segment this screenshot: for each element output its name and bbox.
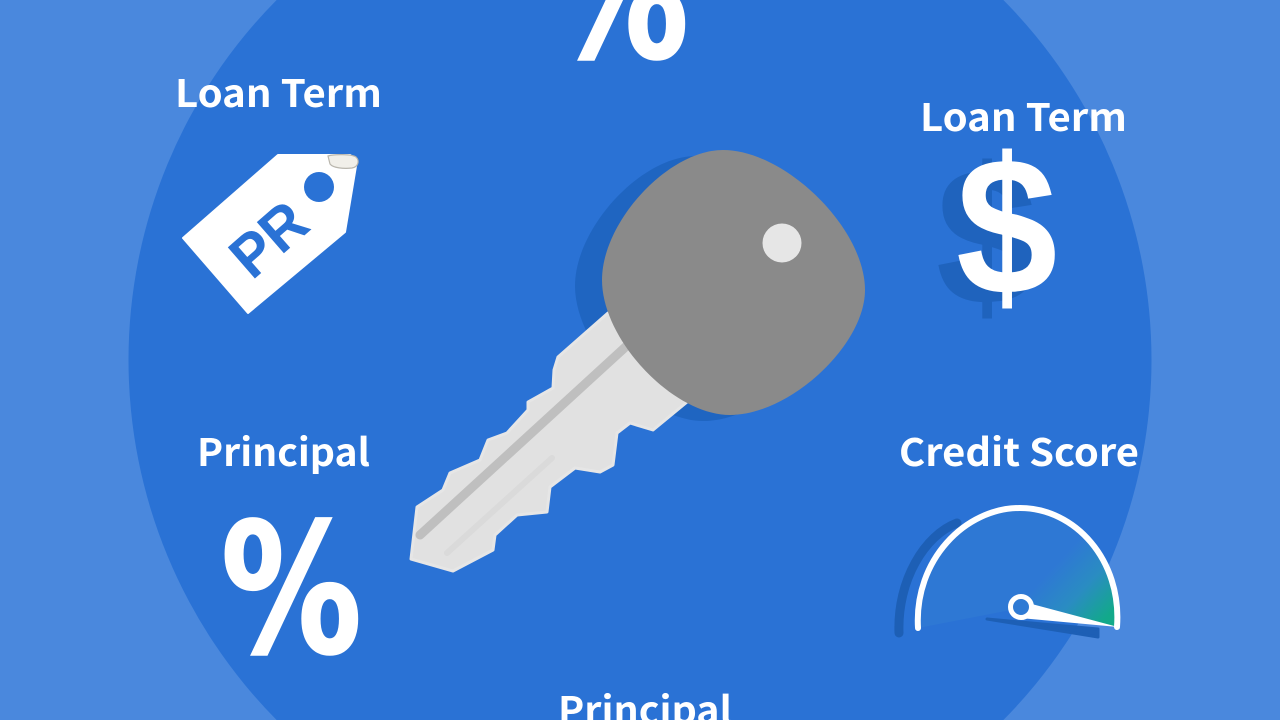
- icon: dollar sign: $: [936, 128, 1037, 346]
- blade lower groove: [447, 458, 552, 553]
- heading: Principal left: Principal: [197, 422, 370, 477]
- icon: percent sign: %: [221, 486, 362, 695]
- key blade: [411, 313, 687, 571]
- key head shadow: [575, 156, 838, 421]
- icon: price tag: PR: [217, 188, 321, 291]
- key hole: [762, 224, 802, 262]
- icon: credit score gauge: [899, 508, 1118, 637]
- key head: [602, 150, 865, 415]
- heading: Credit Score: Credit Score: [899, 422, 1139, 477]
- blade groove: [420, 341, 632, 535]
- background circle: [128, 0, 1152, 720]
- car key: [411, 150, 865, 571]
- icon: price tag: [183, 155, 358, 313]
- heading: Loan Term left: Loan Term: [175, 63, 382, 118]
- icon: dollar sign: $: [956, 118, 1057, 336]
- heading: Loan Term right: Loan Term: [920, 87, 1127, 142]
